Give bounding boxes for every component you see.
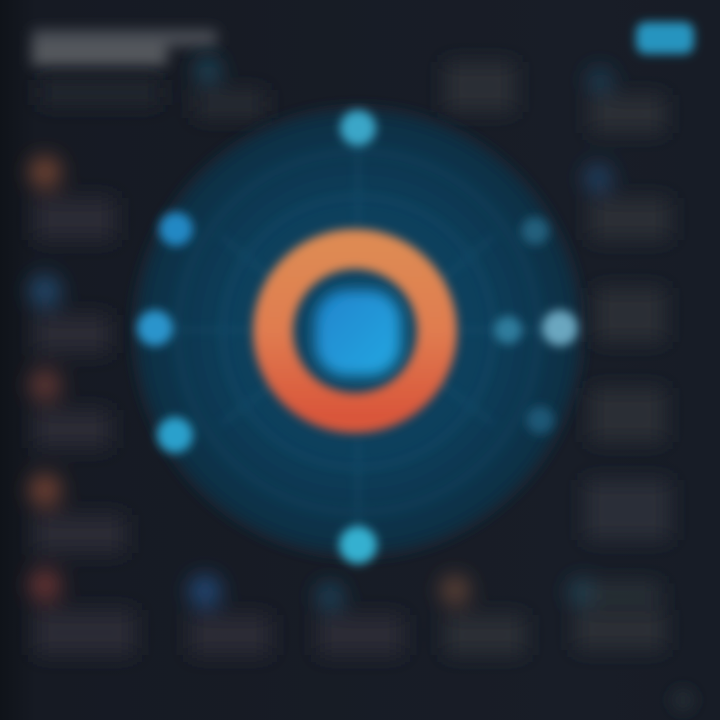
node: lower right: [526, 406, 554, 434]
node: upper left: [159, 212, 193, 246]
left column: [29, 156, 135, 655]
item 3: [595, 288, 665, 342]
orange ring: [273, 249, 437, 413]
node: upper right: [521, 217, 549, 245]
top-right badge: [636, 22, 694, 54]
nodes: [137, 110, 578, 564]
item 4: [29, 474, 125, 553]
title block: [32, 30, 217, 66]
node: right: [542, 310, 578, 346]
bottom row: [189, 575, 525, 655]
item 5: [585, 480, 670, 540]
right column: [568, 67, 670, 650]
item 3: [440, 575, 525, 655]
item 2: [316, 582, 403, 655]
item 1: [587, 67, 665, 133]
radial disc: [134, 108, 582, 556]
item 5: [29, 569, 135, 655]
node: inner right: [494, 316, 522, 344]
node: bottom: [339, 526, 377, 564]
node: left: [137, 310, 173, 346]
node: top: [340, 110, 376, 146]
item 1: [189, 575, 270, 655]
top icon and text: [40, 57, 515, 118]
disc rings: [160, 130, 555, 540]
node: lower left: [157, 417, 193, 453]
item 6: [568, 578, 665, 650]
core square: [315, 290, 401, 376]
item 3: [29, 369, 110, 448]
item 1: [29, 156, 115, 240]
item 2: [29, 275, 110, 353]
item 2: [584, 164, 670, 240]
corner mark: [671, 688, 695, 712]
item 4: [590, 388, 665, 442]
